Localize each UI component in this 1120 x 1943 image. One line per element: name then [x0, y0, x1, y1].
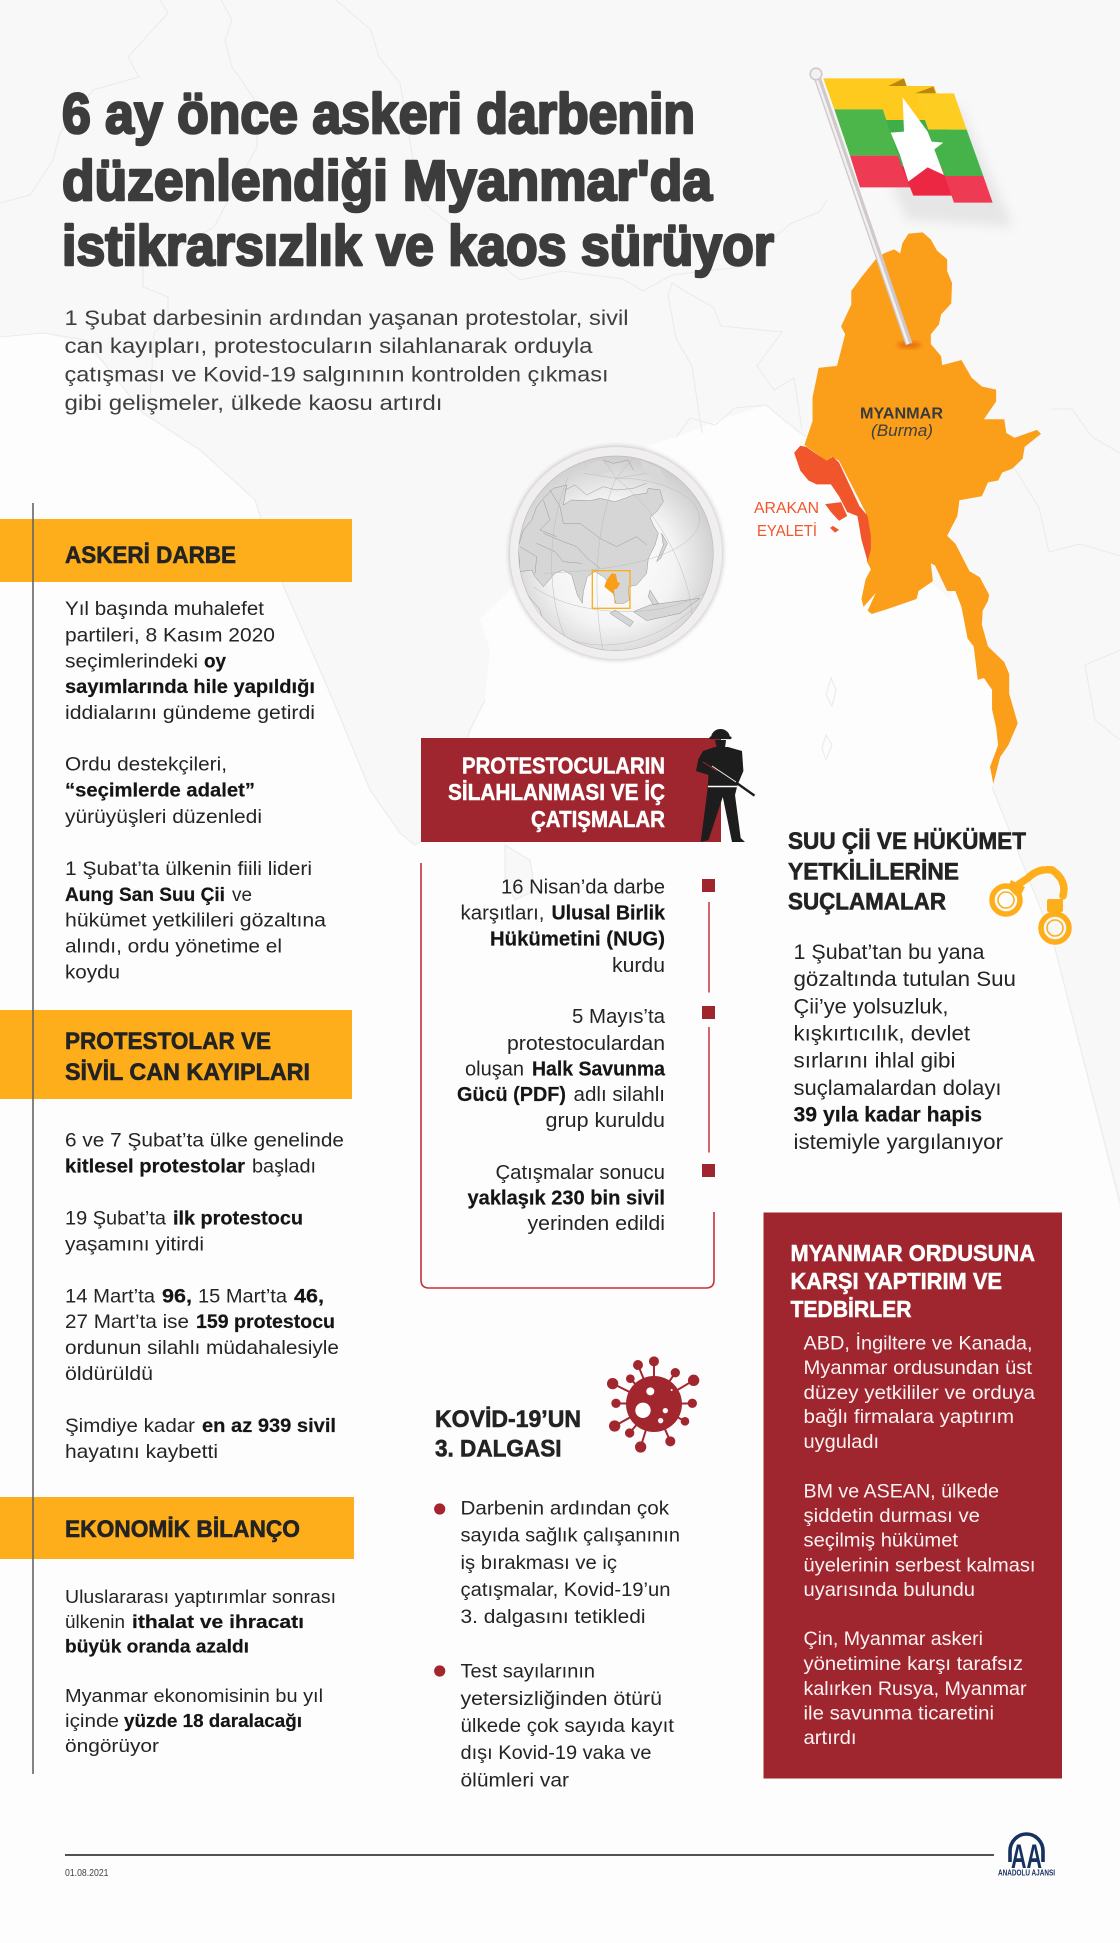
text block: suçlamalar: 1 Şubat’tan bu yana	[794, 941, 985, 964]
heading: yaptırımlar: MYANMAR ORDUSUNA	[790, 1240, 1035, 1266]
text block: protestolar: öldürüldü	[65, 1363, 153, 1385]
bullet list: kovid: yetersizliğinden ötürü	[460, 1688, 662, 1710]
panel: protestolar ve sivil can kayıpları	[0, 1010, 352, 1463]
text block: protestolar: ordunun silahlı müdahalesiyle	[65, 1337, 339, 1359]
panel: kovid-19'un 3. dalgası	[434, 1356, 699, 1792]
panel: suu çii ve hükümet yetkililerine suçlamalar	[788, 828, 1069, 1154]
text block: askeri darbe: “seçimlerde adalet”	[65, 780, 255, 802]
text block: silahlanma: 5 Mayıs’ta	[572, 1006, 666, 1028]
text block: askeri darbe: alındı, ordu yönetime el	[65, 936, 282, 958]
heading: yaptırımlar	[790, 1240, 1035, 1322]
text block: yaptırımlar	[804, 1332, 1036, 1749]
text block: protestolar: yaşamını yitirdi	[65, 1234, 204, 1256]
bullet list: kovid: iş bırakması ve iç	[460, 1552, 617, 1574]
heading: kovid	[435, 1406, 581, 1462]
text block: askeri darbe: koydu	[65, 962, 120, 984]
text block: askeri darbe: ve	[232, 884, 252, 906]
text block: suçlamalar: suçlamalardan dolayı	[794, 1077, 1002, 1100]
label: Myanmar	[860, 406, 943, 440]
bullet list: kovid: Darbenin ardından çok	[460, 1498, 669, 1520]
heading: kovid: KOVİD-19’UN	[435, 1406, 581, 1433]
text block: yaptırımlar: şiddetin durması ve	[804, 1505, 980, 1527]
icon: Myanmar flag on pole	[810, 68, 1013, 348]
text block: ekonomik bilanço	[65, 1586, 336, 1756]
text block: yaptırımlar: uyarısında bulundu	[804, 1579, 975, 1601]
text block: yaptırımlar: seçilmiş hükümet	[804, 1530, 959, 1552]
panel: askeri darbe	[0, 519, 352, 984]
text block: askeri darbe: partileri, 8 Kasım 2020	[65, 624, 275, 646]
intro text: 1 Şubat darbesinin ardından yaşanan protestolar, sivil	[64, 306, 628, 330]
logo: Anadolu Ajansı	[998, 1834, 1055, 1878]
label: Arakan state: EYALETİ	[757, 522, 817, 540]
text block: protestolar: 46,	[294, 1286, 324, 1308]
heading: yaptırımlar: KARŞI YAPTIRIM VE	[790, 1268, 1002, 1294]
bullet list: kovid: Test sayılarının	[460, 1660, 595, 1682]
text block: askeri darbe: iddialarını gündeme getirdi	[65, 702, 315, 724]
title: düzenlendiği Myanmar'da	[62, 149, 713, 213]
text block: yaptırımlar: artırdı	[804, 1727, 856, 1749]
text block: protestolar: 27 Mart’ta ise	[65, 1311, 189, 1333]
icon: handcuffs	[992, 870, 1069, 942]
text block: askeri darbe: Yıl başında muhalefet	[65, 598, 265, 620]
text block: protestolar: 14 Mart’ta	[65, 1286, 155, 1308]
text block: ekonomik bilanço: büyük oranda azaldı	[65, 1636, 249, 1656]
heading: yaptırımlar: TEDBİRLER	[790, 1296, 912, 1322]
text block: suçlamalar: gözaltında tutulan Suu	[794, 968, 1016, 991]
text block: yaptırımlar: Myanmar ordusundan üst	[804, 1357, 1033, 1379]
heading band: protestocuların silahlanması: ÇATIŞMALAR	[531, 806, 665, 832]
intro text: can kayıpları, protestocuların silahlanarak orduyla	[64, 334, 593, 358]
text block: ekonomik bilanço: Uluslararası yaptırımlar sonrası	[65, 1586, 336, 1607]
text block: askeri darbe: Aung San Suu Çii	[65, 884, 225, 906]
text block: ekonomik bilanço: içinde	[65, 1710, 119, 1731]
heading: suçlamalar: SUÇLAMALAR	[788, 888, 946, 916]
heading band: protestolar: SİVİL CAN KAYIPLARI	[65, 1059, 310, 1086]
text block: ekonomik bilanço: öngörüyor	[65, 1735, 159, 1756]
text block: suçlamalar: istemiyle yargılanıyor	[794, 1131, 1003, 1154]
heading band: ekonomik bilanço	[0, 1497, 354, 1559]
text block: silahlanma: yaklaşık 230 bin sivil	[468, 1188, 665, 1210]
heading: kovid: 3. DALGASI	[435, 1436, 562, 1462]
globe locator	[509, 446, 723, 660]
bullet list: kovid: çatışmalar, Kovid-19’un	[460, 1579, 670, 1601]
text block: silahlanma: protestoculardan	[507, 1033, 665, 1055]
text block: protestolar: kitlesel protestolar	[65, 1156, 245, 1178]
text block: silahlanma: Gücü (PDF)	[457, 1084, 566, 1106]
text block: askeri darbe: Ordu destekçileri,	[65, 754, 227, 776]
text block: ekonomik bilanço: yüzde 18 daralacağı	[124, 1710, 302, 1731]
text block: silahlanma: karşıtları,	[460, 902, 544, 924]
title: istikrarsızlık ve kaos sürüyor	[62, 214, 774, 278]
bullet list: kovid: 3. dalgasını tetikledi	[460, 1606, 646, 1628]
bullet list: kovid: dışı Kovid-19 vaka ve	[460, 1742, 652, 1764]
text block: protestolar: ilk protestocu	[173, 1208, 303, 1230]
footer rule	[65, 1854, 994, 1856]
text block: protestolar: hayatını kaybetti	[65, 1441, 218, 1463]
text block: askeri darbe: yürüyüşleri düzenledi	[65, 806, 262, 828]
title	[62, 82, 774, 278]
heading band: protestocuların silahlanması	[421, 738, 721, 842]
text block: protestolar: 19 Şubat’ta	[65, 1208, 166, 1230]
bullet list: kovid: sayıda sağlık çalışanının	[460, 1524, 680, 1546]
icon: armed soldier	[696, 729, 754, 842]
map: Arakan state	[794, 446, 871, 561]
text block: ekonomik bilanço: ülkenin	[65, 1611, 125, 1632]
icon: virus	[607, 1356, 699, 1453]
heading: suçlamalar	[788, 828, 1026, 916]
panel: myanmar ordusuna karşı yaptırım ve tedbirler	[764, 1212, 1062, 1778]
bullet list: kovid: ülkede çok sayıda kayıt	[460, 1715, 675, 1737]
text block: protestolar: 15 Mart’ta	[198, 1286, 287, 1308]
map: Myanmar	[794, 232, 1041, 784]
text block: silahlanma	[457, 876, 666, 1235]
panel: ekonomik bilanço	[0, 1497, 354, 1756]
label: Arakan state	[754, 500, 819, 540]
text block: suçlamalar: Çii’ye yolsuzluk,	[794, 996, 948, 1018]
bullet list: kovid	[434, 1498, 680, 1792]
text block: askeri darbe: 1 Şubat’ta ülkenin fiili lideri	[65, 858, 312, 880]
text block: askeri darbe: seçimlerindeki	[65, 650, 198, 672]
title: 6 ay önce askeri darbenin	[62, 82, 695, 146]
heading band: protestocuların silahlanması: SİLAHLANMASI VE İÇ	[448, 779, 665, 805]
text block: protestolar: 159 protestocu	[196, 1311, 335, 1333]
text block: askeri darbe: oy	[204, 650, 226, 672]
heading band: askeri darbe: ASKERİ DARBE	[65, 542, 236, 569]
text block: protestolar: 6 ve 7 Şubat’ta ülke genelinde	[65, 1130, 344, 1152]
text block: silahlanma: adlı silahlı	[574, 1084, 665, 1106]
text block: silahlanma: 16 Nisan’da darbe	[501, 876, 665, 898]
heading: suçlamalar: SUU Çİİ VE HÜKÜMET	[788, 828, 1026, 855]
text block: protestolar: 96,	[162, 1286, 192, 1308]
heading band: protestolar	[0, 1010, 352, 1099]
text block: ekonomik bilanço: ithalat ve ihracatı	[132, 1611, 304, 1632]
text block: yaptırımlar: bağlı firmalara yaptırım	[804, 1406, 1014, 1428]
text block: silahlanma: Halk Savunma	[532, 1058, 666, 1080]
text block: protestolar	[65, 1130, 344, 1463]
text block: ekonomik bilanço: Myanmar ekonomisinin bu yıl	[65, 1685, 323, 1706]
text block: suçlamalar: kışkırtıcılık, devlet	[794, 1022, 970, 1046]
text block: silahlanma: Ulusal Birlik	[552, 902, 666, 924]
timeline markers	[702, 879, 715, 1177]
logo: Anadolu Ajansı: ANADOLU AJANSI	[998, 1868, 1055, 1878]
text block: yaptırımlar: ile savunma ticaretini	[804, 1702, 994, 1724]
heading: suçlamalar: YETKİLİLERİNE	[788, 858, 959, 886]
text block: silahlanma: Hükümetini (NUG)	[490, 928, 665, 950]
left timeline rule	[32, 503, 34, 1774]
intro text	[64, 306, 628, 415]
text block: protestolar: en az 939 sivil	[202, 1415, 336, 1437]
logo: Anadolu Ajansı: AA	[1011, 1838, 1042, 1876]
text block: protestolar: başladı	[252, 1156, 316, 1178]
date: 01.08.2021	[65, 1868, 109, 1879]
text block: yaptırımlar: ABD, İngiltere ve Kanada,	[804, 1332, 1032, 1354]
text block: suçlamalar: sırlarını ihlal gibi	[794, 1050, 956, 1072]
panel: protestocuların silahlanması ve iç çatışmalar	[421, 729, 754, 1288]
text block: yaptırımlar: düzey yetkililer ve orduya	[804, 1382, 1035, 1404]
outline frame	[421, 863, 714, 1288]
text block: askeri darbe: sayımlarında hile yapıldığı	[65, 676, 315, 698]
text block: yaptırımlar: Çin, Myanmar askeri	[804, 1628, 983, 1650]
text block: askeri darbe	[65, 598, 326, 984]
heading band: ekonomik bilanço: EKONOMİK BİLANÇO	[65, 1516, 300, 1543]
text block: yaptırımlar: üyelerinin serbest kalması	[804, 1554, 1036, 1576]
text block: silahlanma: Çatışmalar sonucu	[496, 1162, 665, 1184]
text block: yaptırımlar: BM ve ASEAN, ülkede	[804, 1480, 999, 1502]
intro text: gibi gelişmeler, ülkede kaosu artırdı	[64, 391, 442, 415]
label: Myanmar: MYANMAR	[860, 406, 943, 422]
text block: askeri darbe: hükümet yetkilileri gözaltına	[65, 910, 326, 932]
text block: silahlanma: yerinden edildi	[528, 1213, 665, 1235]
text block: suçlamalar: 39 yıla kadar hapis	[794, 1104, 982, 1126]
text block: yaptırımlar: yönetimine karşı tarafsız	[804, 1653, 1023, 1675]
text block: yaptırımlar: uyguladı	[804, 1431, 879, 1453]
heading band: protestocuların silahlanması: PROTESTOCULARIN	[462, 752, 665, 778]
text block: silahlanma: kurdu	[612, 955, 665, 977]
intro text: çatışması ve Kovid-19 salgınının kontrolden çıkması	[64, 362, 608, 386]
bullet list: kovid: ölümleri var	[460, 1770, 570, 1792]
heading band: askeri darbe	[0, 519, 352, 582]
text block: silahlanma: oluşan	[465, 1058, 524, 1080]
label: Arakan state: ARAKAN	[754, 500, 819, 517]
heading band: protestolar: PROTESTOLAR VE	[65, 1028, 271, 1055]
text block: silahlanma: grup kuruldu	[546, 1110, 665, 1132]
text block: protestolar: Şimdiye kadar	[65, 1415, 196, 1437]
label: Myanmar: (Burma)	[871, 422, 933, 440]
text block: yaptırımlar: kalırken Rusya, Myanmar	[804, 1678, 1027, 1700]
text block: suçlamalar	[794, 941, 1016, 1154]
